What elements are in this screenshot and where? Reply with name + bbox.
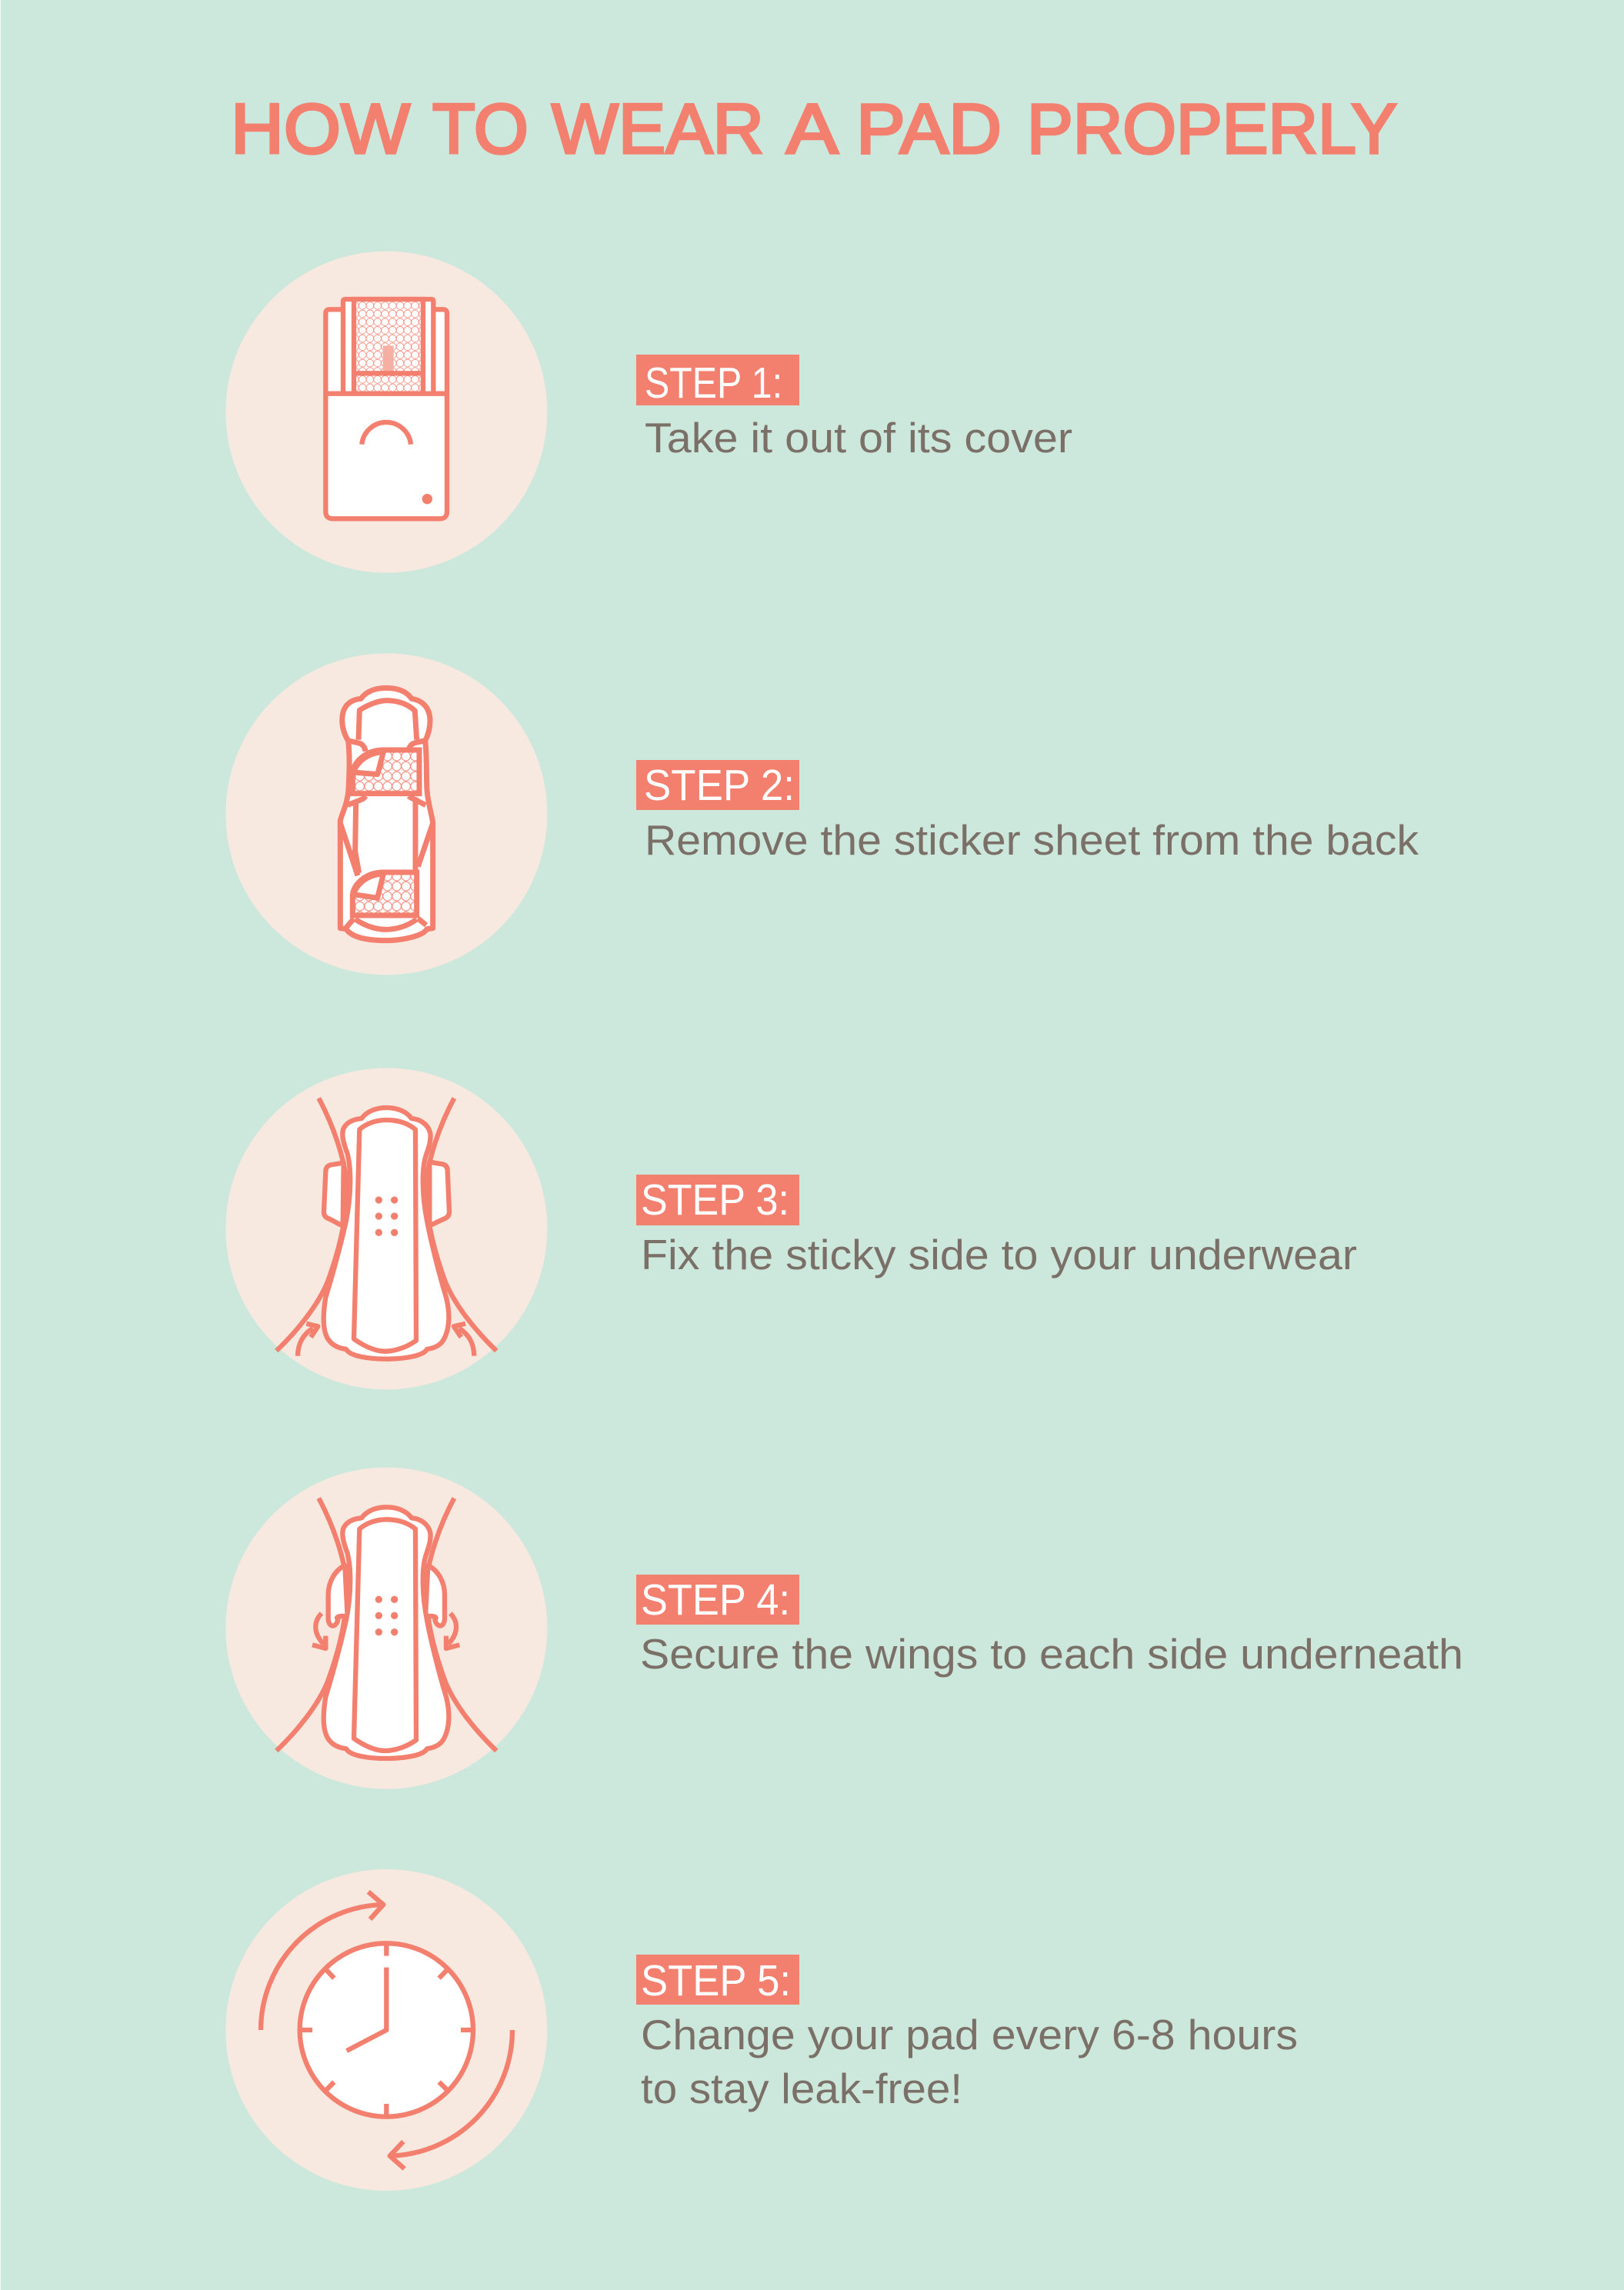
step 5 text: Change your pad every 6-8 hours <box>641 2011 1298 2058</box>
icon: pad fixed to underwear <box>225 1068 547 1389</box>
step 3 text: Fix the sticky side to your underwear <box>641 1231 1357 1278</box>
title: PROPERLY <box>1027 90 1397 168</box>
icon: clock with rotating arrows <box>225 1869 547 2191</box>
title: TO <box>432 90 529 168</box>
panel: step 4 <box>225 1468 1463 1789</box>
title: PAD <box>856 90 1002 168</box>
title: HOW <box>231 90 410 168</box>
step 5 text: to stay leak-free! <box>641 2065 962 2112</box>
title: WEAR <box>552 90 764 168</box>
step 1 text: Take it out of its cover <box>645 414 1072 462</box>
step 4 text: Secure the wings to each side underneath <box>640 1630 1463 1678</box>
step 2 badge: STEP 2: <box>644 761 795 810</box>
step 4 badge: STEP 4: <box>641 1575 790 1625</box>
panel: step 3 <box>225 1068 1357 1389</box>
icon: removing the sticker sheet <box>225 653 547 975</box>
step 5 badge: STEP 5: <box>641 1956 791 2005</box>
step 1 badge: STEP 1: <box>645 358 782 408</box>
panel: step 1 <box>225 252 1072 573</box>
title: A <box>786 90 839 168</box>
panel: step 2 <box>225 653 1419 975</box>
step 5 text <box>641 2011 1298 2112</box>
icon: wings folded underneath <box>225 1468 547 1789</box>
step 2 text: Remove the sticker sheet from the back <box>645 816 1419 864</box>
panel: step 5 <box>225 1869 1298 2191</box>
icon: pad in its cover <box>225 252 547 573</box>
step 3 badge: STEP 3: <box>641 1175 789 1225</box>
